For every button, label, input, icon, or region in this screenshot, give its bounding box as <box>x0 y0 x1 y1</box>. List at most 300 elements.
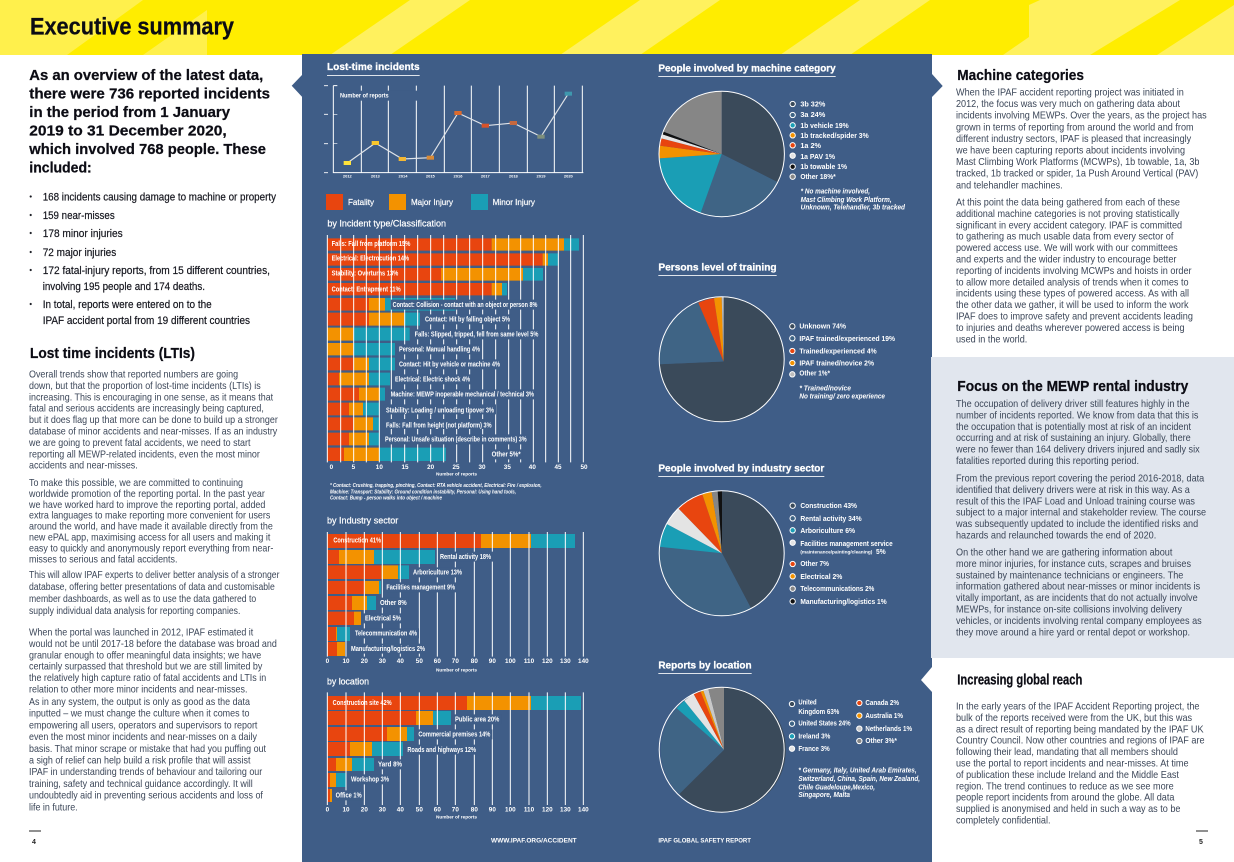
footnote <box>330 483 542 502</box>
intro heading: there were 736 reported incidents <box>29 86 270 102</box>
page number 4 <box>29 830 41 846</box>
body text: lost time incidents: we are going to prevent fatal accidents, we need to start <box>28 437 251 449</box>
body text: machine categories: grown in terms of reporting from around the world and from <box>956 122 1194 133</box>
grey panel: rental industry background <box>931 357 1234 658</box>
heading: People involved by industry sector <box>658 464 824 475</box>
page number 4: 4 <box>32 839 36 846</box>
label masks <box>349 552 493 654</box>
year labels: 2017 <box>481 173 491 178</box>
year labels: 2015 <box>426 173 436 178</box>
pie panel: machine category <box>658 64 905 217</box>
axis numbers: 0 <box>330 464 334 471</box>
legend: Arboriculture 6% <box>800 526 855 535</box>
footnote: Machine: Transport: Stability: Ground condition instability, Personal: Using hand tools, <box>330 489 516 495</box>
body text: focus on the MEWP rental industry: From the previous report covering the period 2016-2018, data <box>956 473 1205 485</box>
body text: lost time incidents: database of minor accidents and near-misses. If as an industry <box>29 426 277 438</box>
body text: machine categories: used in the world. <box>956 334 1027 345</box>
axis numbers: 70 <box>452 806 459 813</box>
bar labels: Electrical: Electrocution 14% <box>332 254 409 263</box>
legend: injury severity: Fatality <box>348 197 375 207</box>
heading: Persons level of training <box>658 263 777 274</box>
legend: France 3% <box>798 744 830 753</box>
legend <box>789 698 912 753</box>
bar labels <box>333 698 500 800</box>
body text: increasing global reach: region. The trend continues to reduce as we see more <box>956 781 1174 792</box>
body text: focus on the MEWP rental industry: the occupation that is potentially most at risk of an incident <box>956 421 1191 433</box>
chart: by industry sector <box>326 516 589 674</box>
bullet list of totals: 168 incidents causing damage to machine or property <box>43 192 277 204</box>
axis numbers <box>326 658 589 665</box>
axis numbers: 30 <box>379 658 386 665</box>
body text: machine categories: and experts and the wider industry to encourage better <box>956 254 1177 266</box>
footnote: Chile Guadeloupe,Mexico, <box>798 782 875 791</box>
body text: machine categories: Mast Climbing Work Platforms (MCWPs), 1b towable, 1a, 3b <box>956 157 1200 168</box>
axis numbers: 140 <box>578 658 589 665</box>
axis numbers: 60 <box>434 658 441 665</box>
axis numbers: 20 <box>427 464 435 471</box>
axis numbers: 30 <box>478 464 486 471</box>
axis numbers: 20 <box>361 658 368 665</box>
intro heading: As an overview of the latest data, <box>29 67 263 84</box>
body text: increasing global reach <box>956 701 1205 827</box>
bar labels: Commercial premises 14% <box>418 730 491 739</box>
legend: Telecommunications 2% <box>800 584 874 593</box>
bar labels: Contact: Collision - contact with an object or person 8% <box>393 300 538 309</box>
axis title: Number of reports <box>436 815 477 821</box>
body text: increasing global reach: as a direct result of reporting being mandated by the IPAF UK <box>956 724 1204 735</box>
label masks <box>383 300 540 459</box>
body text: focus on the MEWP rental industry: MEWPs, for instance on-site collisions involving delivery <box>956 604 1182 616</box>
legend: Construction 43% <box>800 501 857 510</box>
body text: lost time incidents: even the most minor incidents and near-misses on a daily <box>29 732 257 743</box>
body text: focus on the MEWP rental industry: fatalities reported during this reporting period. <box>956 455 1139 467</box>
axis title: Number of reports <box>436 668 477 674</box>
bar labels: Construction 41% <box>333 536 381 545</box>
bar labels <box>333 536 491 653</box>
body text: lost time incidents: This will allow IPAF experts to deliver better analysis of a stronger <box>29 569 280 581</box>
bullet list of totals: 159 near-misses <box>43 210 115 222</box>
legend: Ireland 3% <box>798 732 830 741</box>
body text: lost time incidents: around the world, and have made it available directly from the <box>29 521 273 533</box>
central blue panel <box>292 54 943 862</box>
legend: Other 18%* <box>800 172 836 181</box>
body text: lost time incidents: life in future. <box>29 802 78 814</box>
footer: website: WWW.IPAF.ORG/ACCIDENT <box>491 838 577 845</box>
footnote <box>798 766 920 799</box>
footer: report name: IPAF GLOBAL SAFETY REPORT <box>658 838 751 845</box>
legend: injury severity: Minor Injury <box>493 197 536 207</box>
intro heading <box>28 67 270 176</box>
heading: by industry sector: by Industry sector <box>327 516 398 526</box>
bar labels: Other 8% <box>380 598 407 607</box>
pie chart <box>659 687 786 812</box>
bar labels: Contact: Hit by vehicle or machine 4% <box>399 360 500 369</box>
axis title: Number of reports <box>436 472 477 478</box>
axis numbers: 100 <box>505 806 516 813</box>
axis title: Number of reports <box>340 94 389 100</box>
bullet list of totals: 178 minor injuries <box>43 228 123 240</box>
grid lines <box>327 532 583 657</box>
body text: lost time incidents: As in any system, the output is only as good as the data <box>29 696 251 708</box>
footnote: * Germany, Italy, United Arab Emirates, <box>798 766 917 775</box>
body text: lost time incidents: Overall trends show that reported numbers are going <box>29 369 238 381</box>
body text: focus on the MEWP rental industry: number of incidents reported. We know from data that this is <box>956 410 1199 422</box>
body text: machine categories <box>955 87 1207 345</box>
legend: Netherlands 1% <box>865 724 912 733</box>
legend: Kingdom 63% <box>798 707 839 716</box>
bullet list of totals: involving 195 people and 174 deaths. <box>43 281 205 293</box>
body text: machine categories: reporting of incidents involving MCWPs and hoists in order <box>956 265 1192 277</box>
bar labels: Stability: Overturns 13% <box>332 269 399 278</box>
year labels: 2019 <box>537 173 546 178</box>
body text: machine categories: powered access use. We will work with our committees <box>956 243 1178 254</box>
heading: lost-time incidents: Lost-time incidents <box>327 62 420 73</box>
body text: machine categories: significant in every accident category. IPAF is committed <box>956 220 1182 231</box>
axis numbers: 40 <box>397 806 404 813</box>
body text: lost time incidents: easy to quickly and anonymously report everything from near- <box>29 543 273 555</box>
body text: machine categories: When the IPAF accident reporting project was initiated in <box>956 87 1184 99</box>
body text: machine categories: different industry sectors, IPAF is pleased that increasingly <box>956 133 1191 145</box>
footnote: * Trained/novice <box>799 384 851 393</box>
axis numbers: 20 <box>361 806 368 813</box>
axis numbers: 50 <box>416 658 423 665</box>
body text: lost time incidents: IPAF in understanding trends of behaviour and tailoring our <box>29 767 263 778</box>
body text: lost time incidents: reporting all MEWP-related incidents, even the most minor <box>29 449 261 461</box>
heading: lost time incidents: Lost time incidents (LTIs) <box>30 345 195 362</box>
bullet list of totals: 172 fatal-injury reports, from 15 different countries, <box>43 265 270 277</box>
data markers <box>344 92 572 165</box>
body text: focus on the MEWP rental industry: more minor injuries, for instance cuts, scrapes and bruises <box>956 558 1191 570</box>
pie panel: industry sector <box>658 464 893 616</box>
heading: focus on the MEWP rental industry: Focus on the MEWP rental industry <box>957 378 1189 395</box>
legend: 5% <box>876 547 886 556</box>
body text: increasing global reach: In the early years of the IPAF Accident Reporting project, the <box>956 701 1199 713</box>
axis numbers: 50 <box>580 464 588 471</box>
chart: lost-time incidents <box>324 62 583 210</box>
stacked bars <box>327 534 575 656</box>
legend: (maintenance/painting/cleaning) <box>800 550 873 556</box>
legend: United <box>798 698 817 707</box>
bullet list of totals: In total, reports were entered on to the <box>43 299 212 311</box>
axis numbers: 80 <box>471 806 478 813</box>
axis numbers: 0 <box>326 658 330 665</box>
body text: increasing global reach: people report incidents from around the globe. All data <box>956 792 1175 804</box>
footnote <box>799 384 885 401</box>
axis numbers: 40 <box>529 464 536 471</box>
body text: lost time incidents: relation to other more minor incidents and near-misses. <box>29 684 247 696</box>
body text: lost time incidents: empowering all users, operators and supervisors to report <box>29 720 258 732</box>
body text: focus on the MEWP rental industry: hazards and relaunched towards the end of 2020. <box>956 530 1156 542</box>
axis numbers: 110 <box>524 658 535 665</box>
body text: lost time incidents: certainly surpassed that threshold but we are still limited by <box>29 661 263 673</box>
chart: by incident type <box>327 219 588 502</box>
legend: 3b 32% <box>800 100 826 109</box>
trend line <box>347 94 568 163</box>
bar labels: Rental activity 18% <box>440 552 491 561</box>
pie panel: persons level of training <box>658 263 895 422</box>
heading: machine categories: Machine categories <box>957 67 1084 84</box>
chart: by location <box>326 677 589 845</box>
axis numbers: 110 <box>524 806 535 813</box>
body text: increasing global reach: use the portal to report incidents and near-misses. At time <box>956 758 1189 770</box>
pie chart <box>659 91 784 217</box>
axis numbers: 130 <box>560 658 571 665</box>
axis numbers: 45 <box>554 464 562 471</box>
body text: lost time incidents: we have worked hard to improve the reporting portal, added <box>28 499 265 511</box>
footnote <box>801 187 905 212</box>
legend: Australia 1% <box>865 711 903 720</box>
year labels <box>343 173 574 178</box>
year labels: 2012 <box>343 173 353 178</box>
body text: lost time incidents: would not be until 2017-18 before the database was broad and <box>28 638 277 650</box>
body text: machine categories: to injuries and deaths wherever powered access is being <box>956 322 1185 334</box>
body text: focus on the MEWP rental industry: result of this the IPAF Load and Unload training course was <box>956 496 1195 507</box>
body text: focus on the MEWP rental industry: identified that delivery drivers were at risk in this way. As a <box>956 484 1190 496</box>
bar labels: Public area 20% <box>455 715 500 724</box>
axis numbers: 15 <box>401 464 409 471</box>
bullet list of totals <box>30 192 277 327</box>
body text: machine categories: to allow more detailed analysis of trends when it comes to <box>956 277 1189 288</box>
body text: focus on the MEWP rental industry: On the other hand we are gathering information about <box>956 547 1173 559</box>
bar labels: Stability: Loading / unloading tipover 3% <box>386 406 494 415</box>
legend: Other 3%* <box>865 736 897 745</box>
body text: focus on the MEWP rental industry: vehicles, or incidents involving rental company employees as <box>956 615 1202 627</box>
legend: injury severity: Major Injury <box>411 197 454 207</box>
body text: lost time incidents <box>28 369 280 814</box>
body text: lost time incidents: the relatively high capture ratio of fatal accidents and LTIs in <box>29 673 266 684</box>
legend: 3a 24% <box>800 110 826 119</box>
axis numbers: 60 <box>434 806 441 813</box>
intro heading: in the period from 1 January <box>29 104 231 121</box>
footnote: No training/ zero experience <box>799 392 885 401</box>
body text: machine categories: to gathering as much usable data from every sector of <box>956 231 1174 243</box>
body text: lost time incidents: accidents and near-misses. <box>29 460 138 472</box>
axis numbers: 0 <box>326 806 330 813</box>
year labels: 2013 <box>371 173 381 178</box>
body text: focus on the MEWP rental industry <box>955 398 1206 638</box>
body text: lost time incidents: database, offering better presentations of data and customisable <box>29 581 275 593</box>
body text: lost time incidents: down, but that the proportion of lost-time incidents (LTIs) is <box>29 380 261 392</box>
legend: IPAF trained/novice 2% <box>799 359 874 368</box>
legend: Facilities management service <box>800 539 893 548</box>
legend: 1b vehicle 19% <box>800 121 849 130</box>
axis numbers <box>330 464 588 471</box>
page number 5 <box>1196 830 1208 846</box>
yellow header band <box>0 0 1234 55</box>
body text: machine categories: additional machine categories is not proving statistically <box>956 208 1180 220</box>
intro heading: 2019 to 31 December 2020, <box>29 122 227 140</box>
body text: increasing global reach: bulk of the reports received were from the UK, but this was <box>956 712 1192 724</box>
axis numbers <box>326 806 589 813</box>
axis numbers: 120 <box>542 658 553 665</box>
legend <box>790 100 869 181</box>
legend: Unknown 74% <box>799 322 846 331</box>
legend: 1a PAV 1% <box>800 152 835 161</box>
body text: machine categories: tracked, 1b tracked or spider, 1a Push Around Vertical (PAV) <box>956 168 1198 180</box>
heading: by incident type: by Incident type/Classification <box>327 219 446 229</box>
axis numbers: 90 <box>489 658 496 665</box>
body text: lost time incidents: new ePAL app, maximising access for all users and making it <box>29 532 271 544</box>
bar labels: Falls: Fall from height (not platform) 3% <box>386 421 492 430</box>
bar labels: Machine: MEWP inoperable mechanical / technical 3% <box>391 390 534 399</box>
axis numbers: 10 <box>342 806 350 813</box>
stacked bars <box>327 696 581 802</box>
footnote: * Contact: Crushing, trapping, pinching, Contact: RTA vehicle accident, Electrical: Fire / explosion, <box>330 483 542 489</box>
heading: by location: by location <box>327 677 369 687</box>
legend: Other 7% <box>800 559 829 568</box>
axis numbers: 80 <box>471 658 478 665</box>
axis numbers: 35 <box>504 464 511 471</box>
body text: increasing global reach: supplied is anonymised and held in such a way as to be <box>956 804 1180 815</box>
bar labels: Yard 8% <box>378 760 402 769</box>
bar labels: Electrical: Electric shock 4% <box>395 375 470 384</box>
line chart axes and grid <box>324 86 583 173</box>
body text: machine categories: incidents involving MEWPs. Over the years, as the project has <box>956 110 1207 122</box>
body text: focus on the MEWP rental industry: they move around a hire yard or rental depot or workshop. <box>956 627 1190 638</box>
body text: increasing global reach: following their lead, mandating that all members should <box>956 747 1178 758</box>
axis numbers: 130 <box>560 806 571 813</box>
body text: machine categories: and telehandler machines. <box>956 180 1063 191</box>
axis numbers: 120 <box>542 806 553 813</box>
legend: Rental activity 34% <box>800 514 862 523</box>
bullet list of totals: IPAF accident portal from 19 different countries <box>43 315 251 327</box>
legend: IPAF trained/experienced 19% <box>799 334 895 343</box>
footnote: Unknown, Telehandler, 3b tracked <box>801 203 905 212</box>
body text: focus on the MEWP rental industry: sustained by maintenance technicians or engineers. The <box>956 570 1183 581</box>
legend: United States 24% <box>798 719 851 728</box>
body text: machine categories: we have been capturing reports about incidents involving <box>955 145 1185 157</box>
bar labels: Roads and highways 12% <box>407 745 476 754</box>
legend: 1b towable 1% <box>800 162 847 171</box>
legend: 1a 2% <box>800 141 821 150</box>
body text: focus on the MEWP rental industry: subject to a major internal and stakeholder review. The course <box>956 507 1206 519</box>
bar labels: Contact: Entrapment 11% <box>332 285 401 294</box>
axis numbers: 50 <box>416 806 423 813</box>
bar labels: Electrical 5% <box>365 614 401 623</box>
axis numbers: 40 <box>397 658 404 665</box>
legend: injury severity <box>326 194 536 210</box>
legend <box>790 322 895 378</box>
axis numbers: 90 <box>489 806 496 813</box>
bar labels: Falls: Fall from platform 15% <box>332 239 411 248</box>
footnote: Singapore, Malta <box>798 790 850 799</box>
axis numbers: 100 <box>505 658 516 665</box>
body text: lost time incidents: increasing. This is encouraging in one sense, as it means that <box>29 392 273 404</box>
bar labels <box>332 239 539 459</box>
body text: increasing global reach: of publication these include Ireland and the Middle East <box>956 769 1179 781</box>
body text: machine categories: IPAF does to improve safety and prevent accidents leading <box>956 311 1193 323</box>
bar labels: Contact: Hit by falling object 5% <box>425 315 510 324</box>
body text: increasing global reach: Country Council. Now other countries and regions of IPAF are <box>956 735 1205 747</box>
bar labels: Workshop 3% <box>351 775 389 784</box>
body text: focus on the MEWP rental industry: information gathered about near-misses or minor incidents is <box>956 581 1200 593</box>
pie chart <box>659 297 784 422</box>
body text: lost time incidents: member dashboards, as well as to use the data gathered to <box>29 593 256 605</box>
body text: lost time incidents: misses to serious and fatal accidents. <box>29 554 177 566</box>
body text: lost time incidents: but it does flag up that more can be done to build up a stronger <box>29 415 279 426</box>
bar labels: Other 5%* <box>492 450 521 459</box>
axis numbers: 25 <box>452 464 460 471</box>
body text: focus on the MEWP rental industry: occurring and at risk of sustaining an injury. Globally, there <box>956 433 1191 444</box>
body text: lost time incidents: a sigh of relief can help build a risk profile that will assist <box>29 755 251 767</box>
heading: People involved by machine category <box>658 64 836 75</box>
footnote: Mast Climbing Work Platform, <box>801 195 892 204</box>
stacked bars <box>327 238 579 461</box>
axis numbers: 30 <box>379 806 386 813</box>
legend <box>790 501 893 606</box>
body text: lost time incidents: worldwide promotion of the reporting portal. In the past year <box>28 488 266 500</box>
body text: machine categories: the other data we gather, it will be used to inform the work <box>956 300 1189 311</box>
pie chart <box>659 491 784 616</box>
body text: focus on the MEWP rental industry: was subsequently updated to include the identified risks and <box>955 519 1198 530</box>
body text: lost time incidents: To make this possible, we are committed to continuing <box>29 477 243 489</box>
body text: lost time incidents: fatal and serious accidents are increasingly being captured, <box>29 403 264 415</box>
page number 5: 5 <box>1199 839 1203 846</box>
grid lines <box>327 235 583 462</box>
bar labels: Office 1% <box>336 791 362 800</box>
title: Executive summary <box>30 14 235 40</box>
axis numbers: 10 <box>376 464 383 471</box>
body text: machine categories: 2012, the focus was very much on gathering data about <box>956 99 1180 110</box>
bar labels: Personal: Manual handling 4% <box>399 345 480 354</box>
legend: Other 1%* <box>799 369 830 378</box>
legend: Canada 2% <box>865 698 899 707</box>
axis numbers: 5 <box>352 464 356 471</box>
grid lines <box>327 692 583 805</box>
body text: lost time incidents: When the portal was launched in 2012, IPAF estimated it <box>29 627 254 639</box>
intro heading: included: <box>29 160 92 176</box>
body text: lost time incidents: basis. That minor scrape or mistake that had you puffing out <box>29 743 266 755</box>
body text: machine categories: At this point the data being gathered from each of these <box>956 197 1180 209</box>
body text: increasing global reach: completely confidential. <box>956 815 1051 827</box>
bar labels: Construction site 42% <box>333 698 392 707</box>
intro heading: which involved 768 people. These <box>28 141 266 158</box>
footnote: * No machine involved, <box>801 187 870 196</box>
bar labels: Facilities management 9% <box>386 583 455 592</box>
label masks <box>334 714 501 800</box>
year labels: 2016 <box>454 173 463 178</box>
body text: focus on the MEWP rental industry: The occupation of delivery driver still features highly in the <box>956 398 1190 410</box>
year labels: 2020 <box>564 173 574 178</box>
bar labels: Personal: Unsafe situation (describe in comments) 3% <box>385 435 527 444</box>
body text: focus on the MEWP rental industry: vitally important, as are incidents that do not actually involve <box>956 593 1198 604</box>
body text: lost time incidents: supply individual data analysis for reporting companies. <box>29 605 240 617</box>
bar labels: Telecommunication 4% <box>355 629 417 638</box>
body text: focus on the MEWP rental industry: were no fewer than 164 delivery drivers injured and sadly six <box>955 444 1200 456</box>
body text: lost time incidents: extra languages to make reporting more convenient for users <box>29 510 270 522</box>
body text: lost time incidents: granular enough to offer meaningful data insights; we have <box>29 650 261 662</box>
bar labels: Falls: Slipped, tripped, fell from same level 5% <box>415 330 539 339</box>
bar labels: Manufacturing/logistics 2% <box>351 644 425 653</box>
body text: lost time incidents: inputted – we must change the culture when it comes to <box>29 708 249 720</box>
heading: Reports by location <box>658 661 752 672</box>
heading: increasing global reach: Increasing global reach <box>957 672 1082 688</box>
year labels: 2018 <box>509 173 519 178</box>
axis numbers: 140 <box>578 806 589 813</box>
axis numbers: 70 <box>452 658 459 665</box>
year labels: 2014 <box>399 173 408 178</box>
legend: Electrical 2% <box>800 572 842 581</box>
legend: Manufacturing/logistics 1% <box>800 597 887 606</box>
bullet list of totals: 72 major injuries <box>43 247 117 259</box>
body text: lost time incidents: undoubtedly aid in preventing serious accidents and loss of <box>29 790 263 802</box>
footnote: Contact: Bump - person walks into object / machine <box>330 496 442 502</box>
pie panel: reports by location <box>658 661 920 845</box>
bar labels: Arboriculture 13% <box>413 568 462 577</box>
body text: machine categories: incidents using these types of powered access. As with all <box>956 288 1189 300</box>
legend: 1b tracked/spider 3% <box>800 131 869 140</box>
legend: Trained/experienced 4% <box>799 347 877 356</box>
